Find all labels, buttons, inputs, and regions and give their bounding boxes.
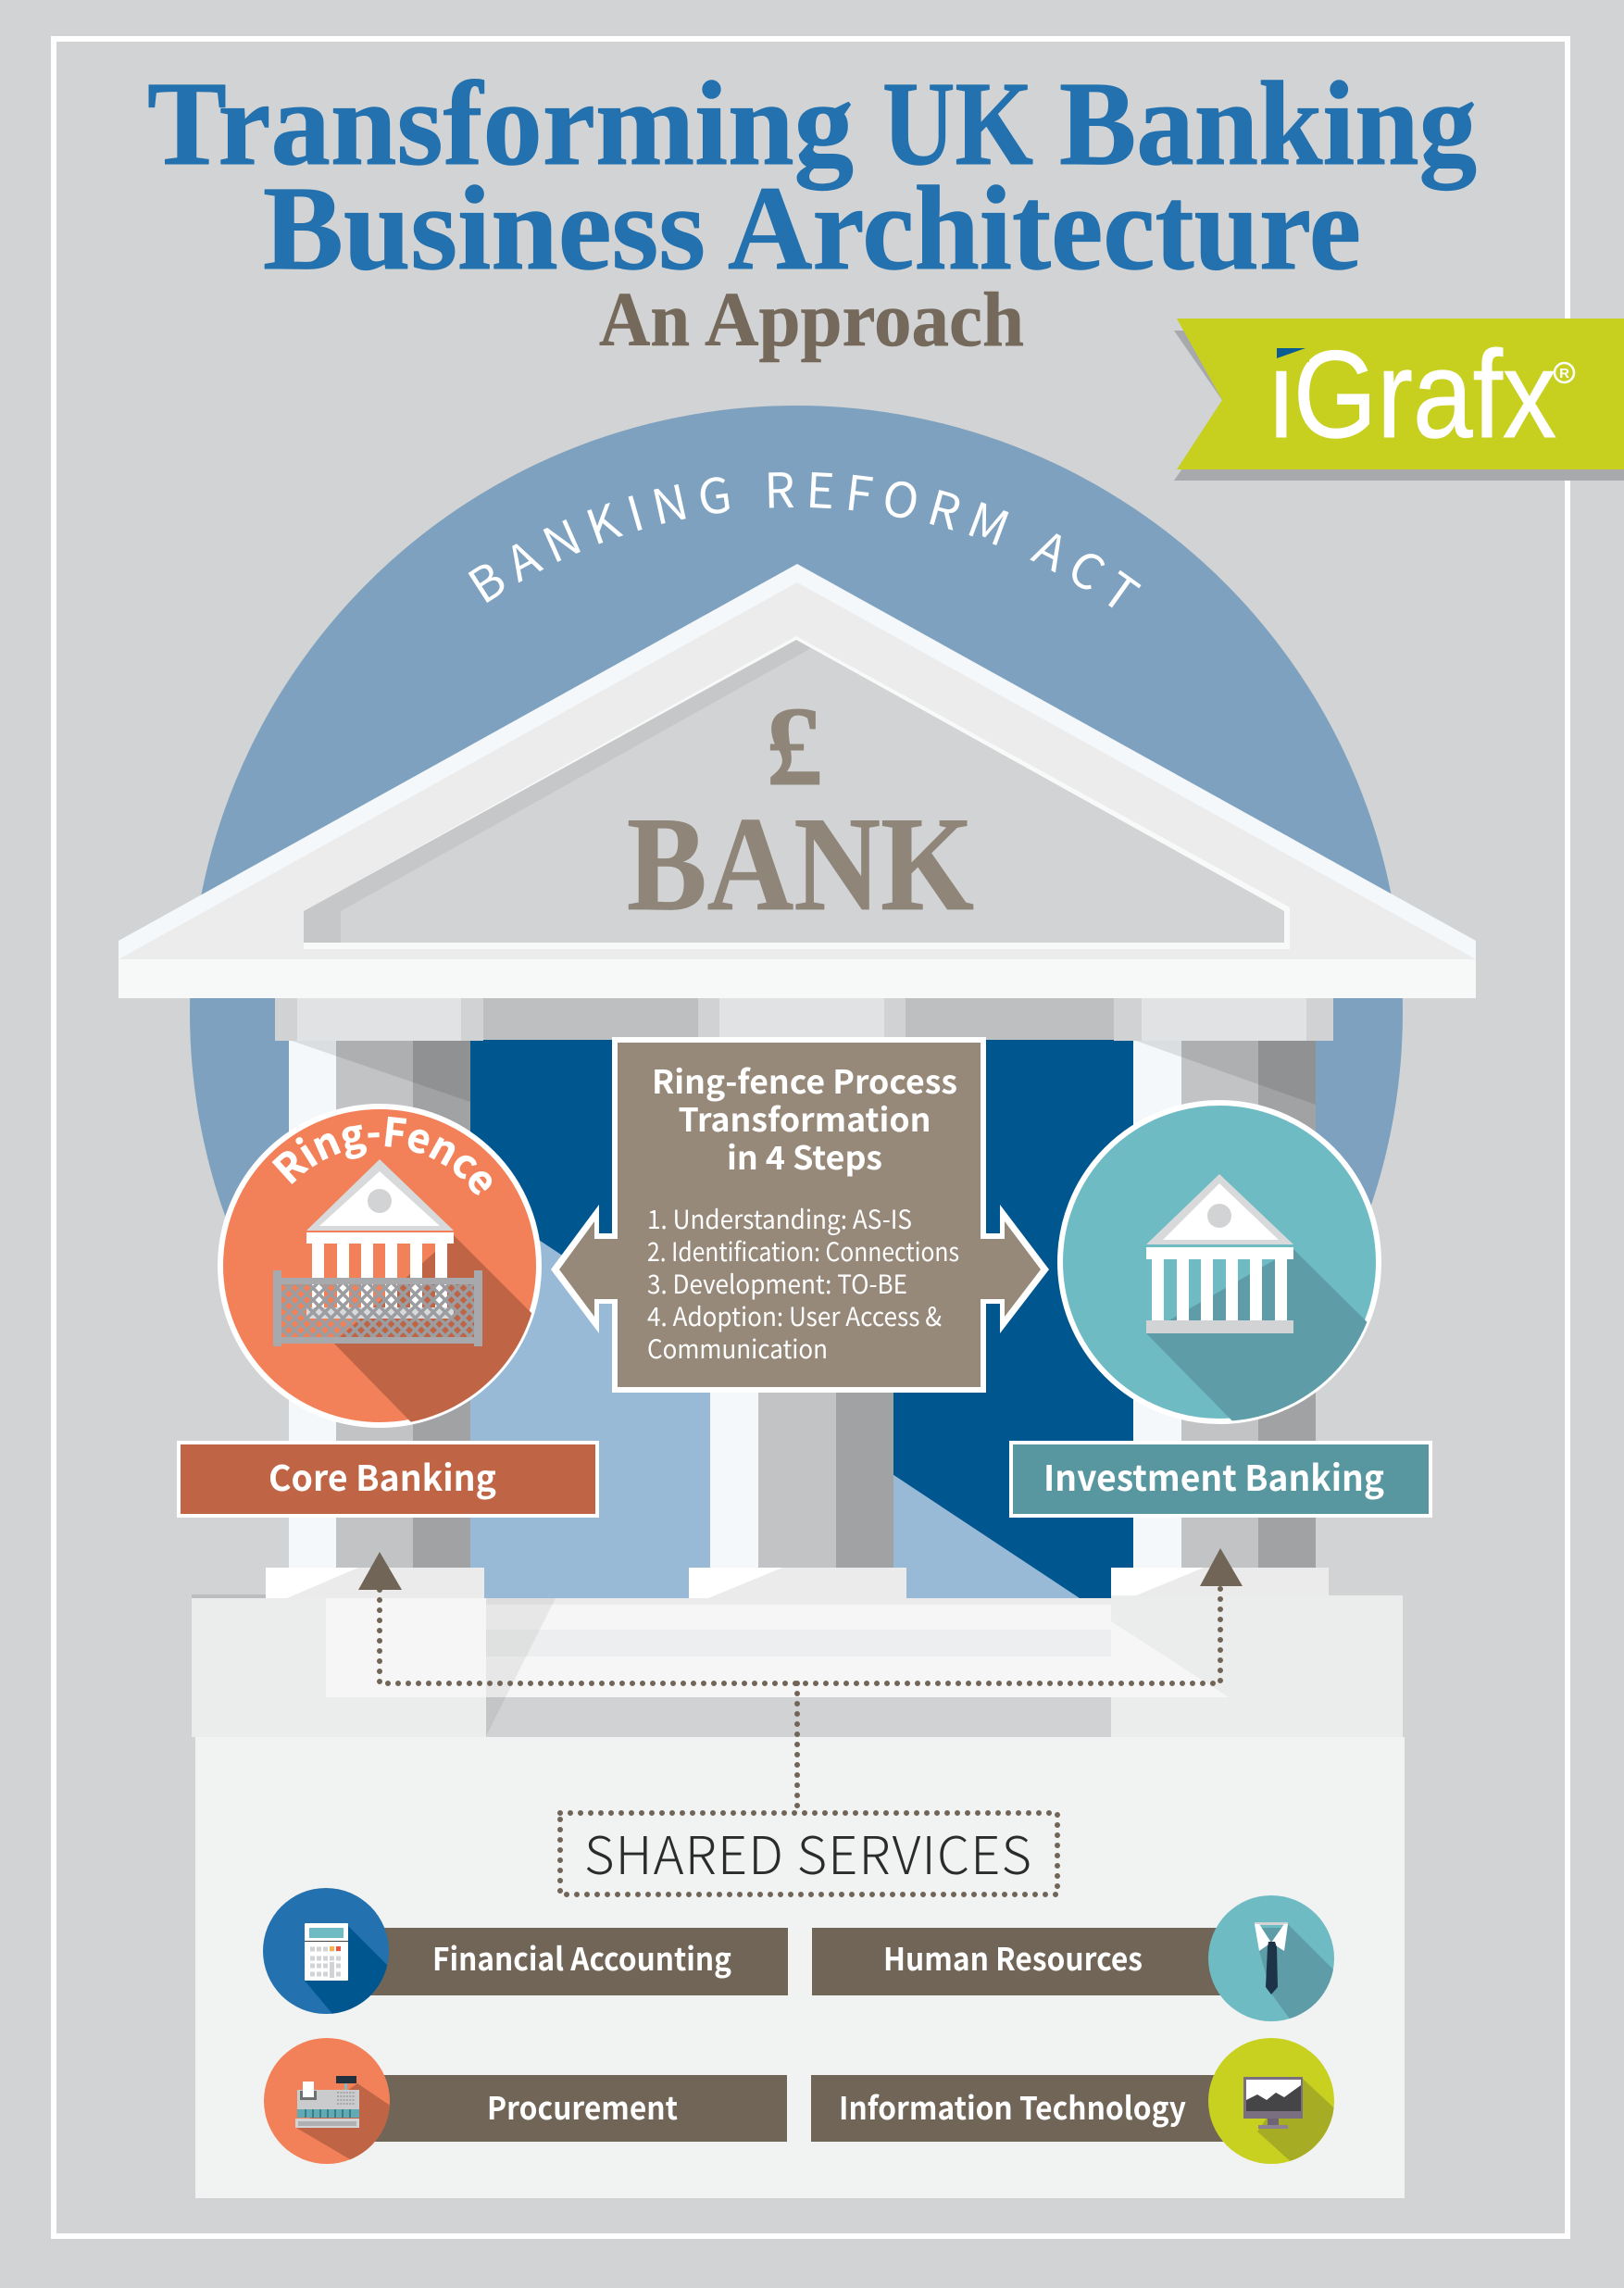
steps list: 3. Development: TO-BE — [647, 1265, 907, 1302]
steps list: 2. Identification: Connections — [647, 1232, 959, 1269]
Investment Banking label: Investment Banking — [1043, 1450, 1384, 1501]
shared services panel — [195, 1737, 1405, 2198]
title: Business — [263, 162, 706, 295]
curved heading: Banking Reform Act: BANKING REFORM ACT — [468, 472, 1141, 607]
steps list: 1. Understanding: AS-IS — [647, 1200, 912, 1237]
title: An — [599, 277, 690, 363]
icon: cash register — [264, 2038, 390, 2164]
box heading: Ring-fence Process — [652, 1056, 957, 1104]
box heading — [652, 1056, 957, 1180]
steps — [192, 1594, 1403, 1737]
Investment Banking label — [1011, 1443, 1430, 1516]
steps list: Communication — [647, 1330, 828, 1367]
dark blue portico interior — [470, 1039, 1133, 1598]
steps list: 4. Adoption: User Access & — [647, 1297, 942, 1334]
icon: calculator — [263, 1888, 389, 2014]
Investment bank circle icon — [1057, 1100, 1381, 1424]
dotted connector with arrows — [358, 1548, 1243, 1812]
icon: monitor with chart — [1208, 2038, 1343, 2167]
Information Technology bar — [811, 2075, 1271, 2142]
title: Architecture — [728, 162, 1361, 295]
Ring-Fence circle with fenced bank icon — [218, 1104, 542, 1428]
iGrafx logo ribbon — [1174, 319, 1624, 481]
box heading: in 4 Steps — [727, 1132, 882, 1180]
pound sign: £ — [767, 684, 822, 809]
Procurement bar: Procurement — [487, 2083, 678, 2129]
Human Resources bar: Human Resources — [883, 1934, 1143, 1980]
central process box with double arrow — [551, 1037, 1049, 1393]
title: UK — [882, 57, 1033, 191]
blue circle background — [190, 406, 1403, 1619]
title: Banking — [1059, 57, 1477, 191]
title: Transforming — [147, 57, 854, 191]
Ring-Fence circle with fenced bank icon: Ring-Fence — [272, 1117, 493, 1195]
Core Banking label — [179, 1443, 597, 1516]
title — [147, 57, 1477, 363]
steps list — [647, 1200, 959, 1367]
columns — [289, 1040, 1316, 1569]
Procurement bar — [326, 2075, 787, 2142]
Information Technology bar: Information Technology — [839, 2083, 1186, 2129]
Core Banking label: Core Banking — [269, 1450, 496, 1501]
BANK label: BANK — [627, 789, 974, 939]
Human Resources bar — [812, 1928, 1271, 1995]
box heading: Transformation — [678, 1094, 931, 1142]
title: Approach — [705, 277, 1024, 363]
iGrafx logo ribbon: R — [1559, 366, 1569, 381]
Financial Accounting bar — [326, 1928, 788, 1995]
capitals and frieze — [275, 998, 1333, 1041]
bases of columns — [266, 1568, 1329, 1598]
bank roof pediment — [119, 564, 1476, 998]
Shared Services heading box: SHARED SERVICES — [584, 1815, 1031, 1890]
iGrafx logo ribbon: iGrafx — [1269, 326, 1556, 464]
icon: shirt collar and tie — [1208, 1895, 1334, 2021]
Financial Accounting bar: Financial Accounting — [432, 1934, 731, 1980]
